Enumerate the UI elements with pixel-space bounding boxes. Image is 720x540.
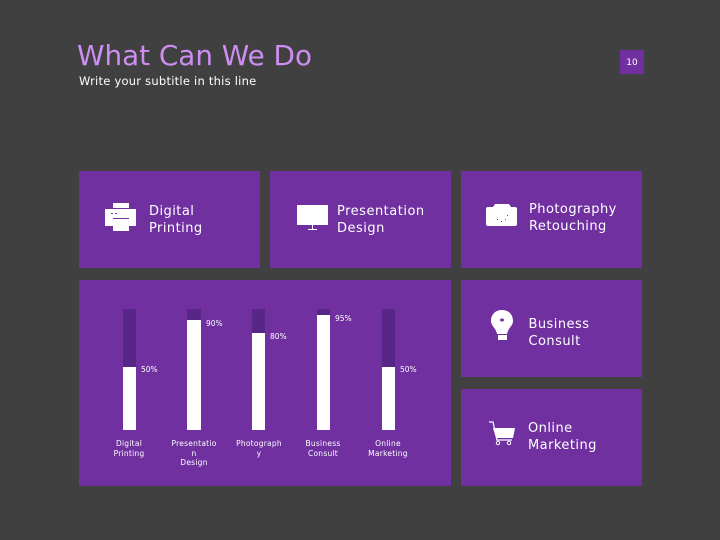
label: business consult <box>528 317 589 349</box>
axis label: presentation design: n <box>191 448 196 458</box>
panel: skill bar chart <box>79 280 451 486</box>
label: online marketing: Marketing <box>528 438 597 453</box>
panel: presentation design <box>270 171 451 268</box>
axis label: digital printing: Digital <box>116 439 142 448</box>
axis label: digital printing: Printing <box>114 448 144 458</box>
label: presentation design: Design <box>337 221 385 236</box>
label: online marketing <box>528 421 597 453</box>
value: 50%: 50% <box>141 365 158 374</box>
page number badge: 10 <box>626 58 638 68</box>
label: digital printing <box>149 204 203 236</box>
icon: camera <box>486 204 517 226</box>
axis label: presentation design: Presentatio <box>171 439 217 448</box>
value: 80%: 80% <box>270 332 287 341</box>
axis label: online marketing <box>368 439 408 458</box>
label: photography retouching: Retouching <box>529 219 607 234</box>
bar: business consult 95% <box>317 309 330 430</box>
axis label: presentation design: Design <box>180 458 208 467</box>
icon: printer <box>105 203 136 231</box>
axis label: online marketing: Online <box>375 439 401 448</box>
value: 50%: 50% <box>400 365 417 374</box>
axis label: photography <box>236 439 282 458</box>
axis label: business consult: Business <box>305 439 341 448</box>
bar: presentation design 90% <box>187 309 201 430</box>
label: presentation design: Presentation <box>337 204 425 219</box>
bar: photography 80% <box>252 309 265 430</box>
subtitle: Write your subtitle in this line <box>79 74 256 88</box>
label: digital printing: Printing <box>149 221 203 236</box>
icon: light bulb <box>491 310 513 340</box>
axis label: digital printing <box>114 439 144 458</box>
axis label: presentation design <box>171 439 217 467</box>
title: What Can We Do <box>77 39 312 72</box>
label: business consult: Consult <box>528 334 581 349</box>
label: presentation design <box>337 204 425 236</box>
axis label: photography: Photograph <box>236 439 282 448</box>
panel: photography retouching <box>461 171 642 268</box>
label: photography retouching: Photography <box>529 202 617 217</box>
bar: digital printing 50% <box>123 309 136 430</box>
page number badge <box>620 50 644 74</box>
bar: online marketing 50% <box>382 309 395 430</box>
label: online marketing: Online <box>528 421 573 436</box>
axis label: photography: y <box>257 448 261 458</box>
axis label: business consult <box>305 439 341 458</box>
axis label: online marketing: Marketing <box>368 448 408 458</box>
icon: shopping cart <box>489 421 515 446</box>
panel: digital printing <box>79 171 260 268</box>
value: 90%: 90% <box>206 319 223 328</box>
panel: online marketing <box>461 389 642 486</box>
value: 95%: 95% <box>335 314 352 323</box>
label: photography retouching <box>529 202 617 234</box>
label: business consult: Business <box>528 317 589 332</box>
icon: monitor <box>297 205 328 230</box>
panel: business consult <box>461 280 642 377</box>
axis label: business consult: Consult <box>308 448 338 458</box>
label: digital printing: Digital <box>149 204 194 219</box>
